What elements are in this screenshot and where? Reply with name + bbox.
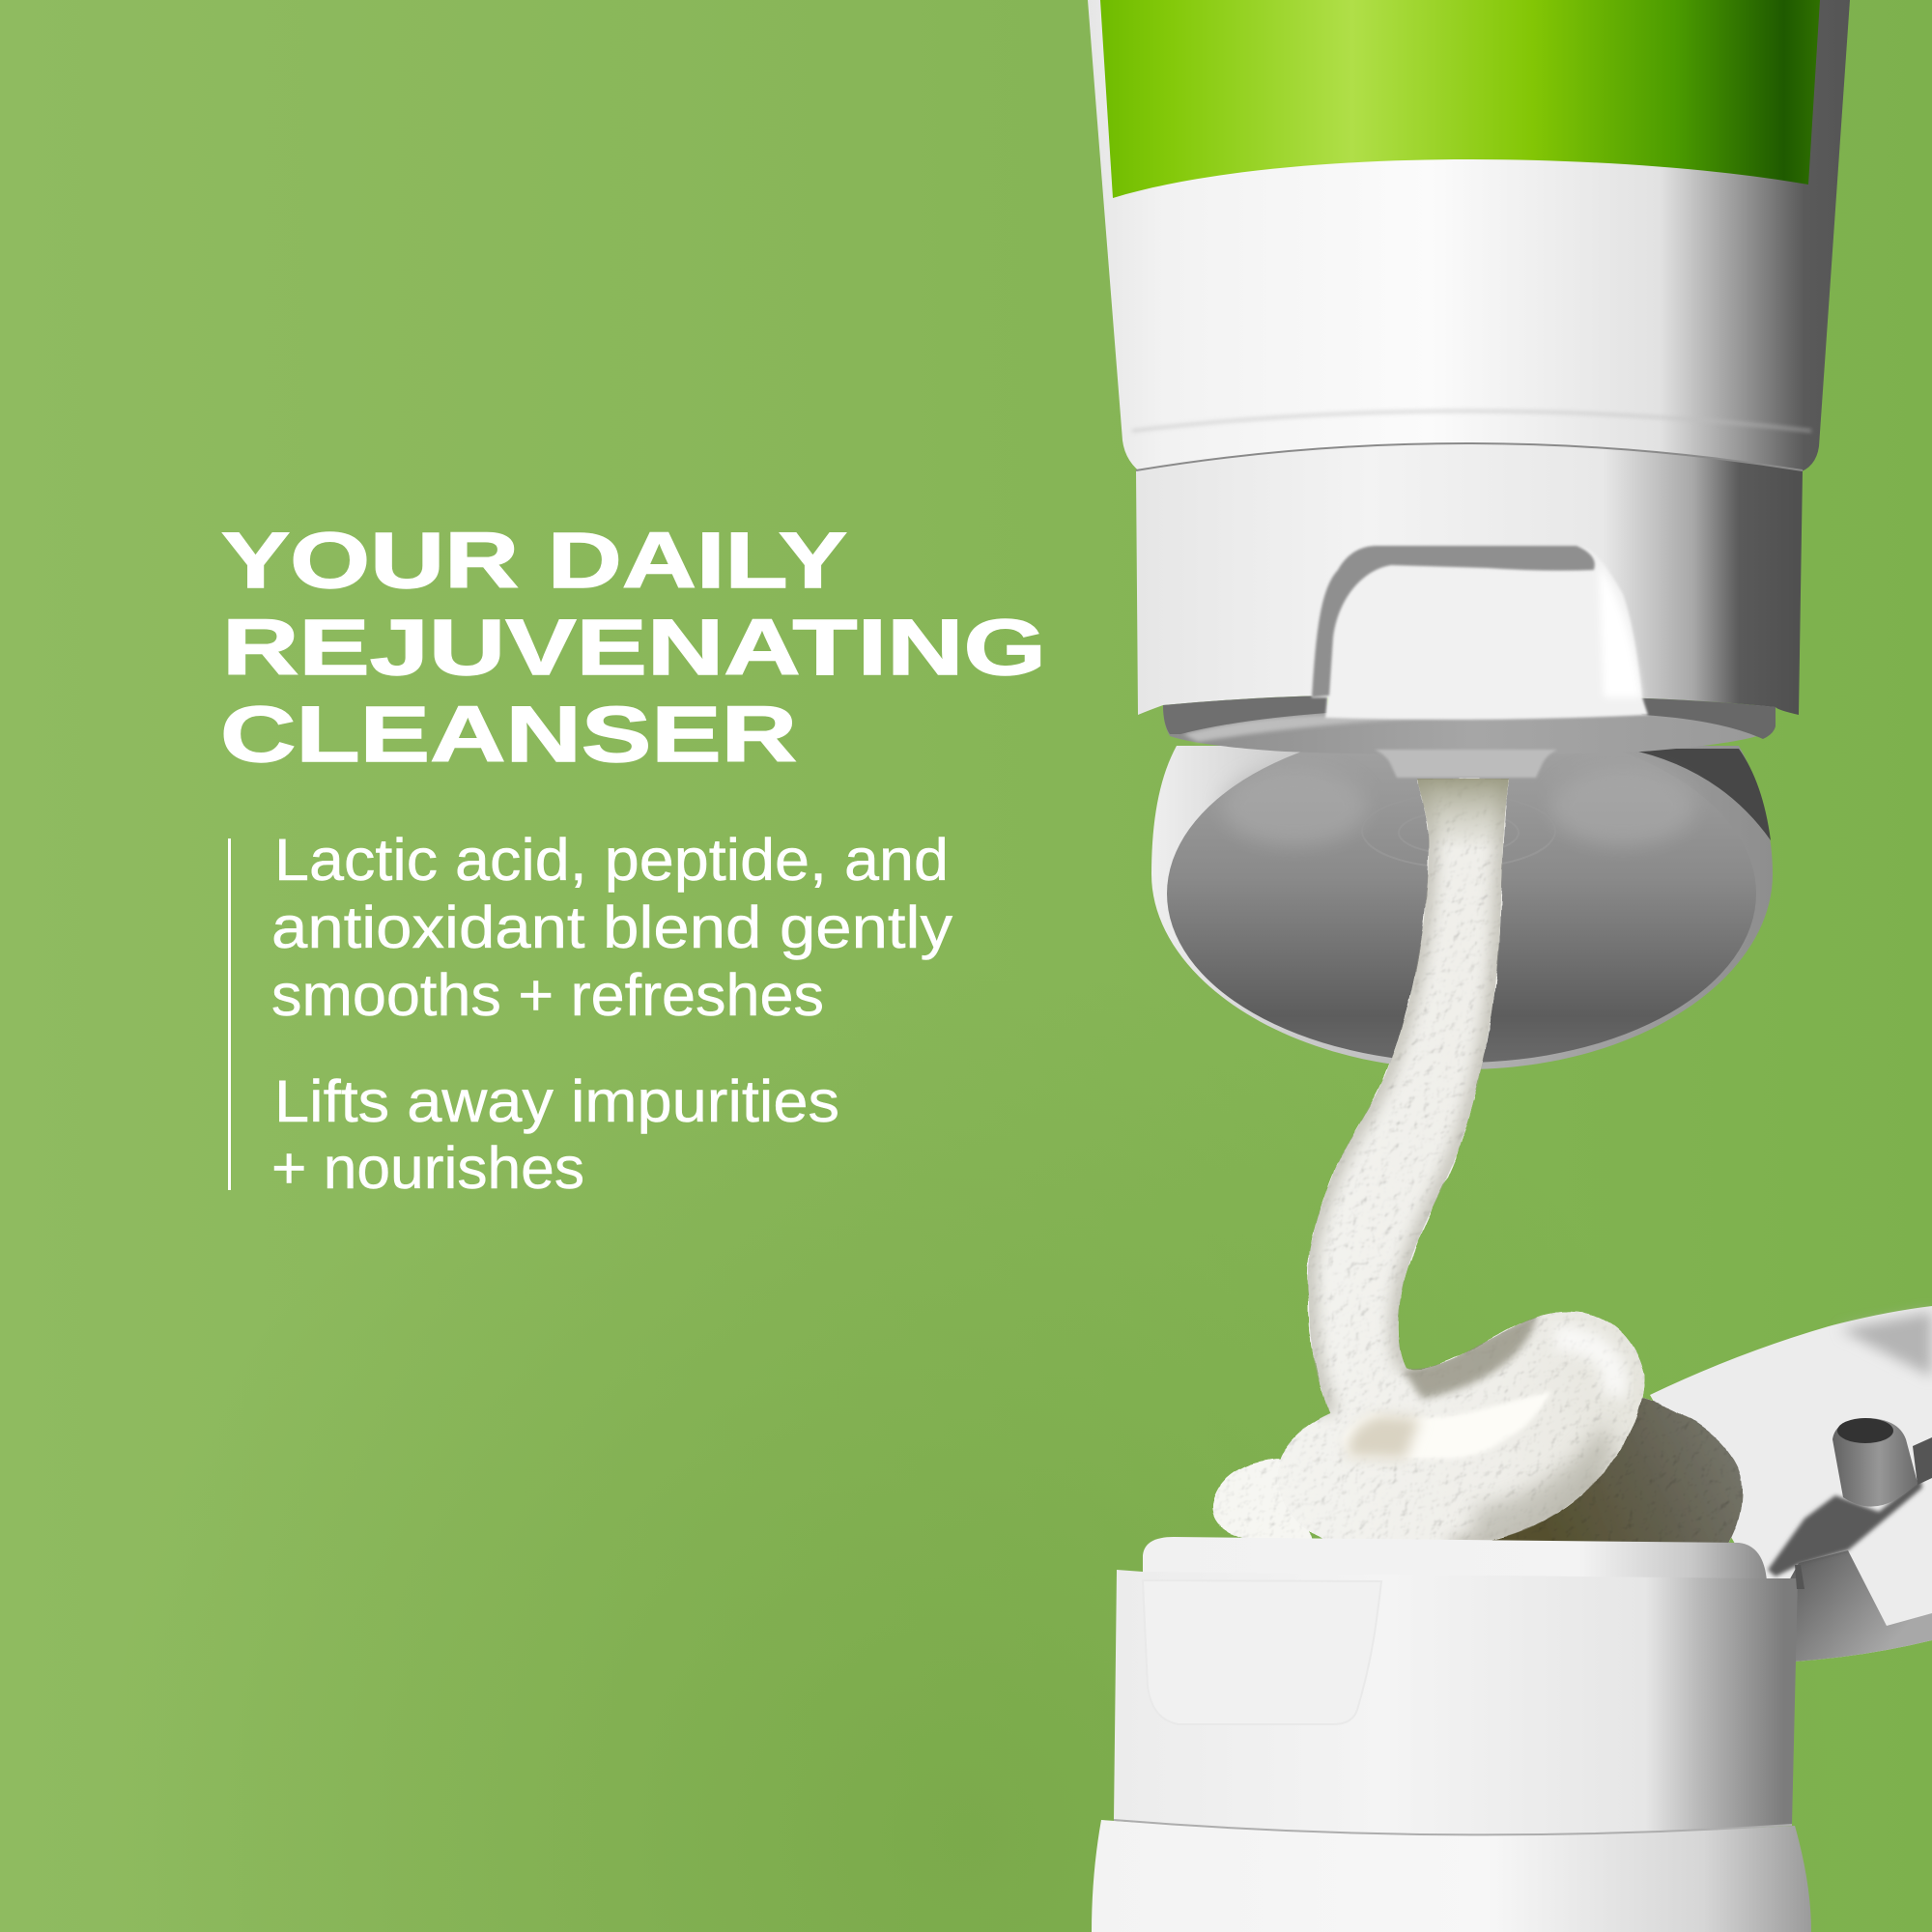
lobe highlight xyxy=(1555,1338,1615,1396)
benefit two xyxy=(271,1068,839,1201)
cap nozzle xyxy=(1833,1418,1918,1507)
green tube label xyxy=(1100,0,1820,198)
foam strand and loop xyxy=(1276,779,1644,1546)
edge shade xyxy=(1308,779,1602,1546)
bottle top inner lip xyxy=(1143,1537,1767,1581)
cap top shade xyxy=(1840,1312,1932,1377)
foam inner hollow xyxy=(1343,1391,1551,1459)
left foam blob xyxy=(1212,1459,1314,1546)
upside-down tube xyxy=(1088,0,1850,475)
cap hinge notch xyxy=(1795,1565,1804,1589)
cap underside shade xyxy=(1787,1550,1932,1662)
upper band shade xyxy=(1403,1312,1538,1399)
spout xyxy=(1375,750,1557,778)
thumb tab xyxy=(1312,546,1648,720)
benefit one: smooths + refreshes xyxy=(271,962,824,1028)
nozzle cast shadow xyxy=(1768,1478,1922,1577)
hinged open cap on bottle xyxy=(1650,1306,1932,1662)
tube rim shade xyxy=(1132,412,1811,431)
collar top seam xyxy=(1136,443,1803,470)
strand top shadow xyxy=(1417,779,1509,842)
vertical divider line xyxy=(228,838,231,1190)
hollow cream shadow xyxy=(1348,1415,1420,1459)
cap bottom seam xyxy=(1114,1820,1792,1834)
benefit one: antioxidant blend gently xyxy=(271,895,953,960)
left dark lip xyxy=(1163,696,1327,734)
foam volume shading xyxy=(1308,779,1615,1546)
lower bottle body xyxy=(1092,1820,1811,1932)
heading: REJUVENATING xyxy=(222,604,1046,692)
benefit text block xyxy=(271,827,953,1201)
benefit two: Lifts away impurities xyxy=(274,1068,839,1134)
flipped-open tube lid xyxy=(1151,724,1773,1069)
lower lobe shade xyxy=(1468,1420,1615,1541)
right dark patch xyxy=(1913,1437,1932,1485)
thumb right highlight xyxy=(1599,565,1641,697)
cleanser foam xyxy=(1212,779,1743,1546)
lower disc xyxy=(1163,705,1776,755)
heading xyxy=(220,517,1046,779)
right dark lip xyxy=(1621,697,1776,739)
benefit one xyxy=(271,827,953,1028)
collar body xyxy=(1136,443,1803,715)
disc upper left sheen xyxy=(1183,715,1449,742)
tube body xyxy=(1088,0,1850,475)
benefit one: Lactic acid, peptide, and xyxy=(274,827,949,893)
dispenser collar xyxy=(1136,443,1803,778)
heading: YOUR DAILY xyxy=(221,517,847,605)
heading: CLEANSER xyxy=(220,691,797,779)
shaded back blob xyxy=(1468,1397,1743,1546)
thumb groove xyxy=(1312,546,1595,697)
cap thumb notch xyxy=(1143,1580,1381,1724)
benefit two: + nourishes xyxy=(271,1135,584,1201)
bottle cap base xyxy=(1114,1565,1804,1834)
